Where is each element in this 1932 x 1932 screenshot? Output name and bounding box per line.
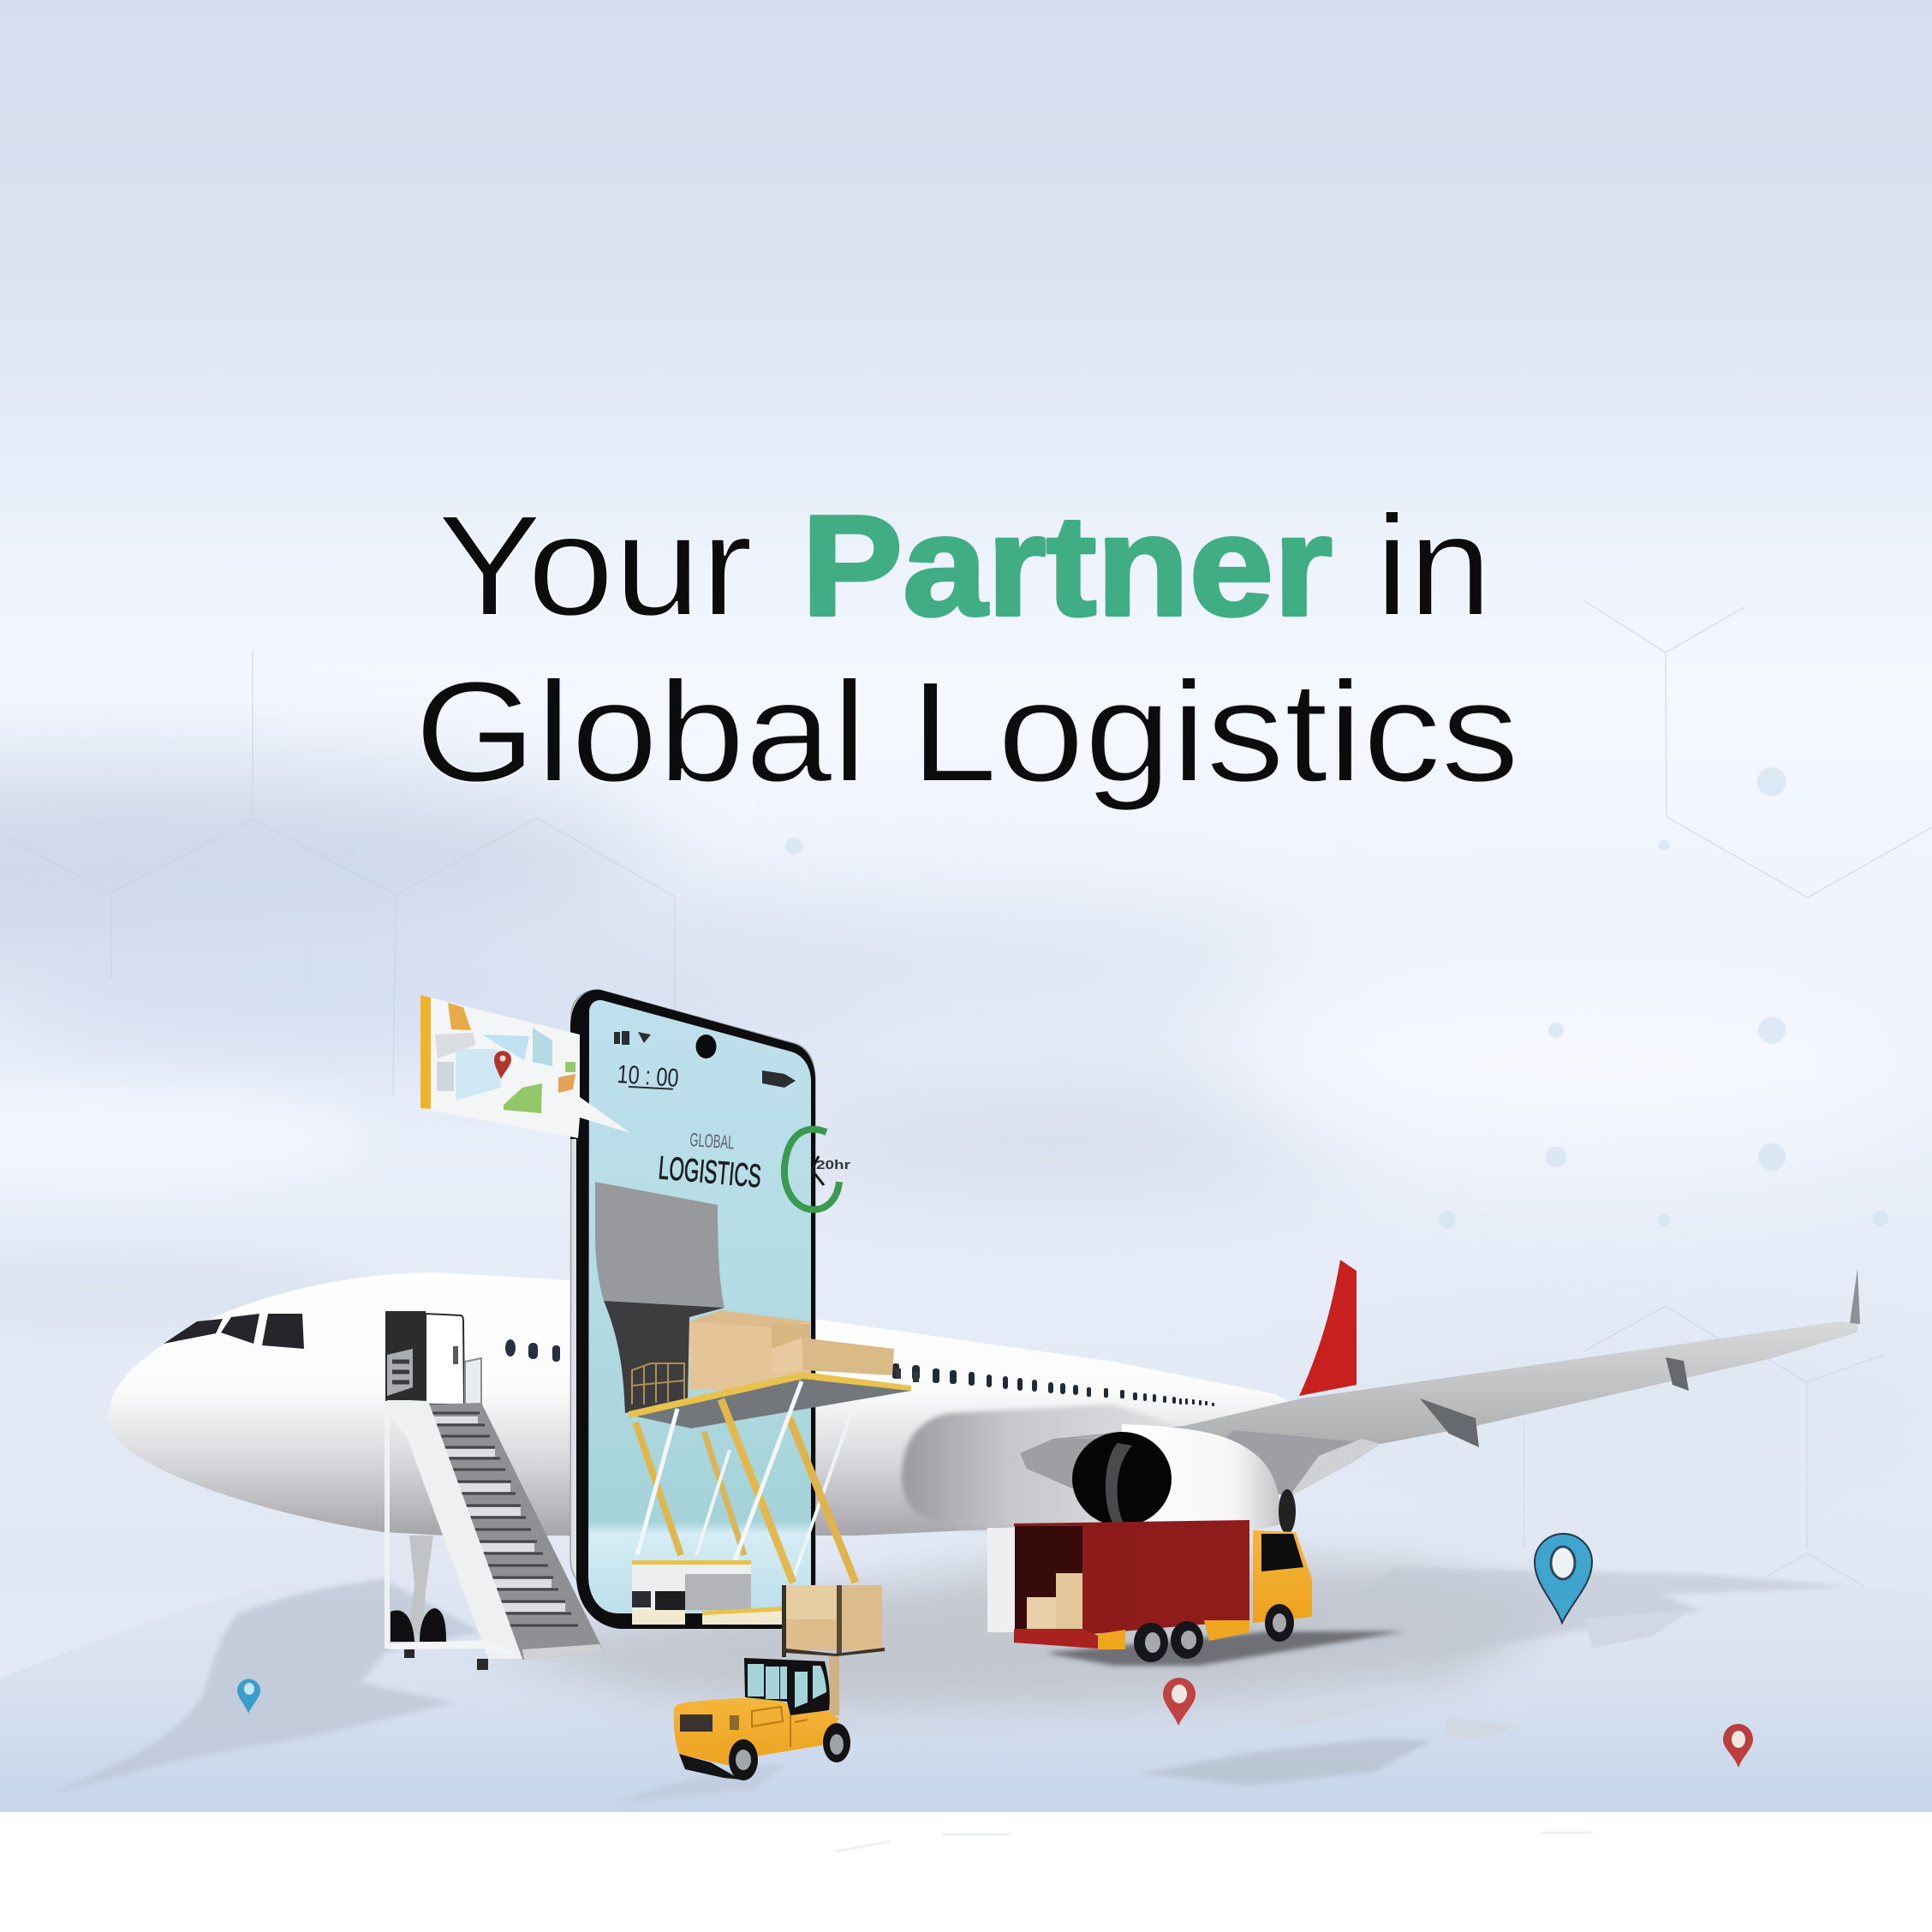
ground shadow under vehicles [480,1559,1567,1713]
clock ring [784,1130,839,1209]
stair treads [428,1413,578,1625]
card panel [420,995,630,1138]
map continent: south [1138,1738,1433,1786]
engine intake inner ring [1106,1443,1132,1524]
forklift mast [829,1656,839,1715]
screen clock text: 10 : 00 [617,1060,680,1093]
cargo box interior [1015,1524,1083,1633]
phone screen [588,1000,811,1613]
engine intake [1072,1432,1172,1526]
nose landing gear [391,1535,446,1642]
map card [420,995,630,1138]
forklift track [679,1754,741,1780]
fuselage [109,1273,1310,1535]
screen small heading: GLOBAL [689,1129,735,1154]
map continent: central [1011,1567,1852,1670]
forklift [674,1656,850,1780]
parcel on forklift [782,1585,885,1657]
forklift rear wheel [823,1723,850,1762]
airstairs [384,1311,604,1670]
forklift body [674,1698,839,1766]
cargo box side [1014,1520,1249,1634]
forward cabin windows [505,1339,560,1362]
lift base vehicle [632,1560,784,1625]
delivery truck [987,1520,1404,1666]
wing upper surface [1070,1321,1857,1444]
lift front arms [635,1381,856,1597]
title [414,486,1519,812]
map islands [1267,1610,1691,1738]
tail fin [1299,1260,1357,1396]
location pin: red right [1723,1724,1753,1768]
forklift grille [680,1714,713,1732]
engine cowl [1122,1424,1282,1533]
flap fairing: inner [1420,1398,1479,1447]
ground plane [0,1533,1932,1812]
cab window [1261,1534,1303,1571]
phone silver frame [570,990,815,1593]
hexagon network lines and dots [0,600,1932,1593]
stair white stringer [384,1400,522,1659]
left support column [385,1411,390,1649]
aft cabin windows [892,1363,1214,1406]
rear axle wheel 2 [1171,1621,1203,1659]
clock hands [812,1156,824,1185]
phone [570,990,854,1629]
open rear door [987,1528,1016,1632]
forklift panel lines [752,1707,808,1747]
winglet [1850,1268,1860,1324]
camera notch [695,1035,716,1058]
handrail [465,1358,481,1404]
platform underside [629,1379,911,1428]
phone body [570,990,815,1629]
screen heading: LOGISTICS [657,1150,762,1195]
chassis yellow [1098,1620,1249,1649]
map pin [494,1051,511,1079]
front wheel [1265,1604,1294,1642]
cargo inside [1027,1573,1082,1631]
card yellow edge [420,995,431,1109]
map small coast mark [617,1764,788,1803]
wing root light panel [1289,1439,1380,1497]
cargo scissor lift [629,1310,919,1625]
truck floor bumper [1014,1629,1098,1649]
stair back stringer [426,1403,604,1660]
title line 2: Global Logistics [414,653,1519,812]
cab windows [748,1664,826,1708]
delivery clock badge [784,1130,850,1209]
title line 1: Your [438,486,753,646]
platform yellow rim [629,1372,911,1418]
airplane [109,1260,1860,1535]
location pin: red centre [1163,1678,1196,1726]
clock label: 20hr [816,1158,850,1172]
warehouse gate [632,1363,684,1404]
flap fairing: outer [1666,1357,1689,1391]
warehouse dark interior [604,1301,724,1413]
truck shadow [1045,1631,1404,1666]
location pin: large blue [1535,1534,1592,1623]
jet door opening [385,1311,464,1404]
forklift light [730,1715,739,1730]
title line 1 [438,486,1492,646]
engine [1072,1424,1296,1534]
scissor lift back arms [696,1406,854,1578]
forklift front wheel [729,1739,758,1780]
map continent: west [51,1579,480,1794]
rear axle wheel 1 [1134,1623,1168,1662]
boxes on platform [689,1310,919,1390]
map blocks [448,1003,471,1030]
wing underside [1020,1323,1857,1497]
warehouse door gray [595,1182,724,1308]
title line 1: Partner [802,486,1333,646]
ground with world map [0,1533,1932,1812]
location pin: small blue [237,1679,260,1714]
stair base [384,1640,522,1659]
cockpit windows [164,1314,304,1349]
wing [1020,1268,1860,1497]
white footer band [0,1812,1932,1932]
status icons [614,1031,796,1088]
title line 1: in [1375,486,1492,646]
forklift cab [744,1658,830,1715]
cab [1253,1530,1312,1623]
wing belly fairing [902,1404,1267,1530]
engine rear cone [1279,1489,1296,1534]
footer faint marks [835,1833,1593,1852]
stair casters [404,1649,488,1670]
